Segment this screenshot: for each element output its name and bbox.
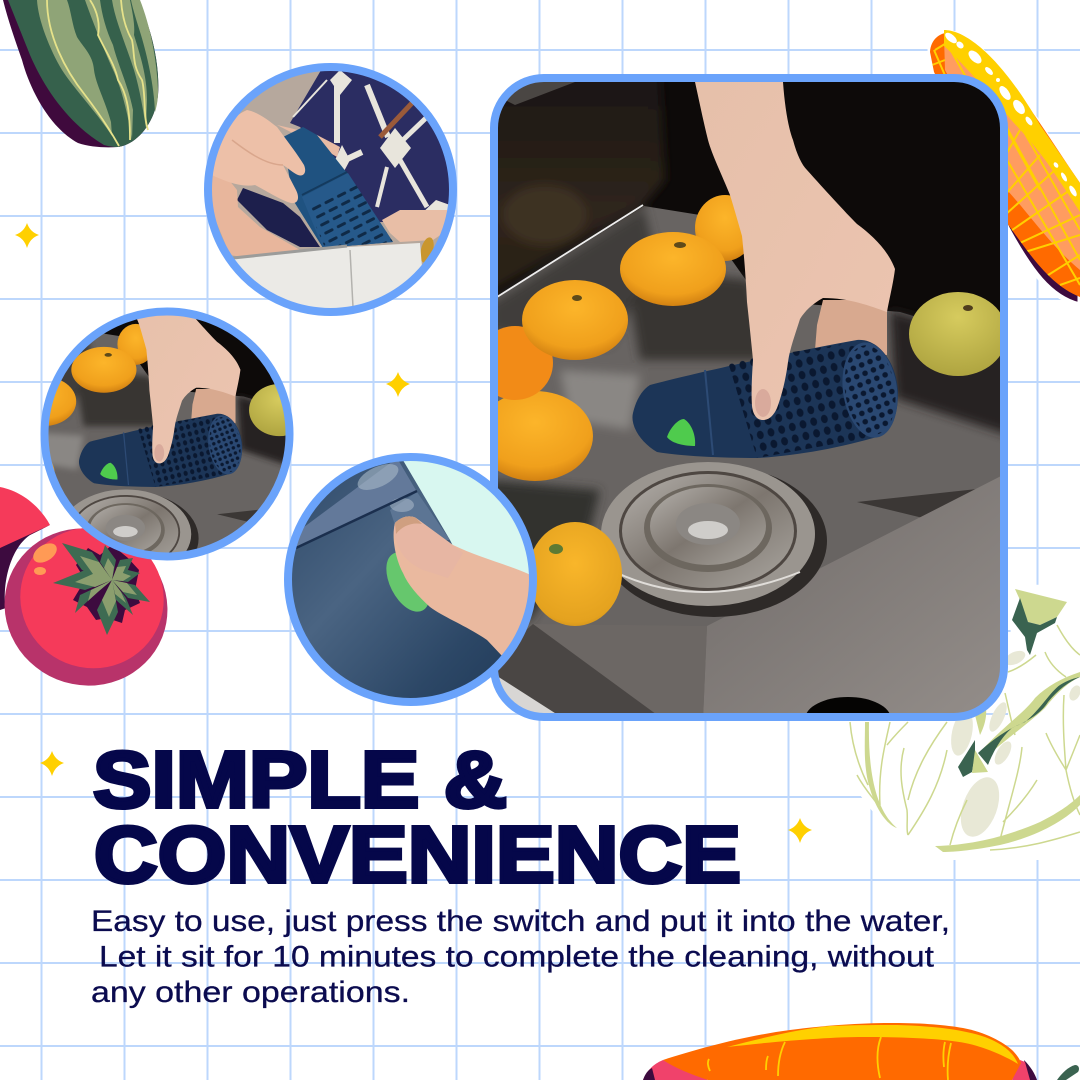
main photo: hand placing purifier in sink of fruit <box>477 70 1015 741</box>
sparkle <box>15 223 39 248</box>
body text: Easy to use, just press the switch and put it into the water, <box>91 905 950 938</box>
icon: cabbage <box>850 584 1080 860</box>
sparkle <box>386 372 410 397</box>
title: SIMPLE & <box>93 735 507 824</box>
body text <box>91 905 950 1009</box>
icon: carrot <box>643 1023 1079 1080</box>
title <box>93 735 741 899</box>
sparkle <box>40 751 64 776</box>
body text: Let it sit for 10 minutes to complete the cleaning, without <box>99 940 934 974</box>
circle photo: device placed into handbag <box>200 60 470 320</box>
icon: tomatoes <box>0 487 191 710</box>
circle photo: close-up of device in sink <box>40 308 294 560</box>
body text: any other operations. <box>91 976 410 1009</box>
sparkle <box>788 818 812 843</box>
icon: cucumber <box>3 0 158 147</box>
icon: corn <box>930 30 1080 305</box>
title: CONVENIENCE <box>94 810 741 899</box>
circle photo: finger pressing green switch <box>284 453 537 706</box>
